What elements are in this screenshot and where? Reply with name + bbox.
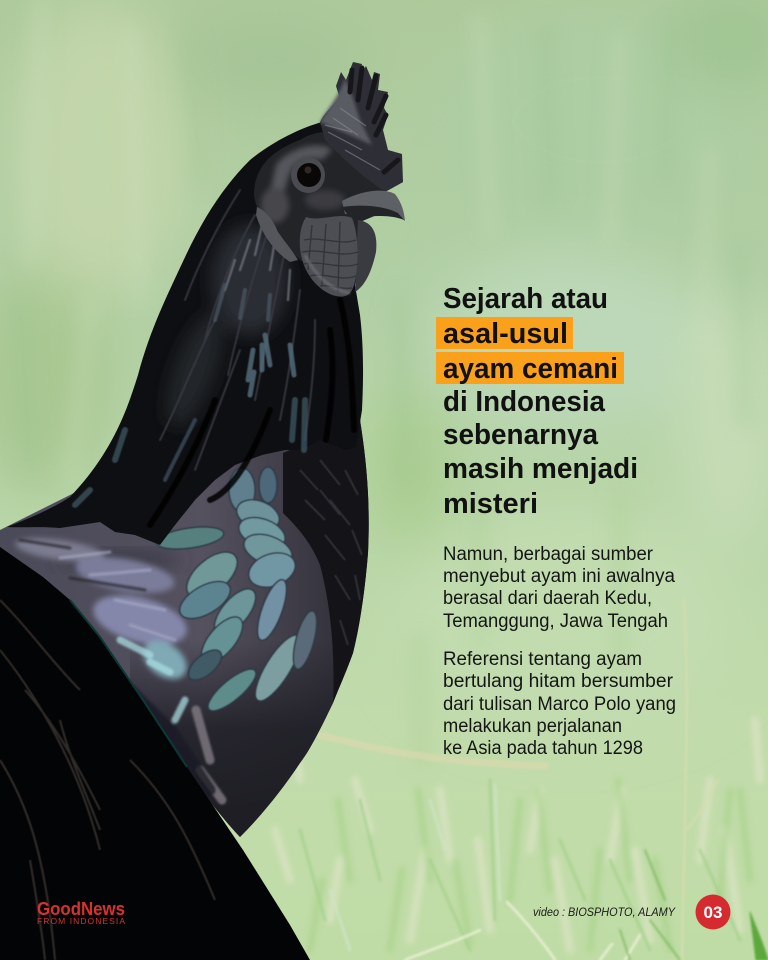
head lighter skin xyxy=(261,145,345,223)
dark panel scales xyxy=(300,460,362,645)
text block: heading: Sejarah atau xyxy=(443,283,608,315)
beak xyxy=(342,191,405,221)
text block: paragraph two: bertulang hitam bersumber xyxy=(443,671,674,692)
body and breast xyxy=(0,420,369,837)
upper blurred streaks xyxy=(20,0,745,760)
highlight: asal-usul xyxy=(436,317,573,349)
page number badge: 03 xyxy=(704,903,722,922)
text block: paragraph two xyxy=(443,649,676,759)
text block: heading: misteri xyxy=(443,488,538,520)
lower grass patches xyxy=(275,720,760,950)
comb xyxy=(320,62,403,192)
text block: paragraph one: menyebut ayam ini awalnya xyxy=(443,566,675,587)
eye xyxy=(297,163,321,187)
text block: paragraph two: dari tulisan Marco Polo yang xyxy=(443,694,676,715)
text block: paragraph two: ke Asia pada tahun 1298 xyxy=(443,738,643,759)
wattle texture xyxy=(302,222,358,292)
lower breast shade xyxy=(130,640,340,837)
teal feathers centre group xyxy=(155,523,321,717)
pale lower feathers xyxy=(20,540,222,800)
text block: paragraph one: Temanggung, Jawa Tengah xyxy=(443,611,668,632)
text block: heading: di Indonesia xyxy=(443,386,606,418)
rooster xyxy=(0,62,405,837)
foreground dark wing xyxy=(0,547,310,960)
wattle xyxy=(300,216,358,297)
teal feathers upper column xyxy=(229,467,300,593)
right dark scaled feather panel xyxy=(283,420,369,703)
highlight: ayam cemani xyxy=(436,352,624,384)
neck blurred sheen xyxy=(156,225,288,433)
text block: paragraph one: berasal dari daerah Kedu, xyxy=(443,588,652,609)
comb spikes shadow xyxy=(350,68,398,172)
comb light side xyxy=(320,78,372,145)
eye ring xyxy=(291,157,325,193)
logo: GoodNews from Indonesia: GoodNews xyxy=(37,898,125,919)
text block: paragraph one: Namun, berbagai sumber xyxy=(443,544,654,565)
photo credit: video : BIOSPHOTO, ALAMY xyxy=(533,905,676,919)
eye highlight xyxy=(304,166,312,174)
breast shadow xyxy=(60,550,180,570)
text block: paragraph one xyxy=(443,544,675,632)
comb texture xyxy=(325,108,380,170)
page number badge xyxy=(696,894,730,930)
text block: paragraph two: melakukan perjalanan xyxy=(443,716,622,737)
text block: heading: masih menjadi xyxy=(443,453,638,485)
neck feather strokes xyxy=(75,190,354,525)
text block: heading: sebenarnya xyxy=(443,419,599,451)
logo: GoodNews from Indonesia: FROM INDONESIA xyxy=(37,916,125,926)
wattle back xyxy=(355,220,376,292)
neck fold lobe xyxy=(256,207,298,262)
grass blades xyxy=(300,600,768,960)
head xyxy=(254,132,403,285)
neck hackle xyxy=(7,122,363,545)
text block: paragraph two: Referensi tentang ayam xyxy=(443,649,642,670)
text block: heading xyxy=(436,283,638,520)
left purple feathers xyxy=(14,534,194,687)
text block: heading: ayam cemani xyxy=(443,353,618,385)
text block: heading: asal-usul xyxy=(443,318,568,350)
